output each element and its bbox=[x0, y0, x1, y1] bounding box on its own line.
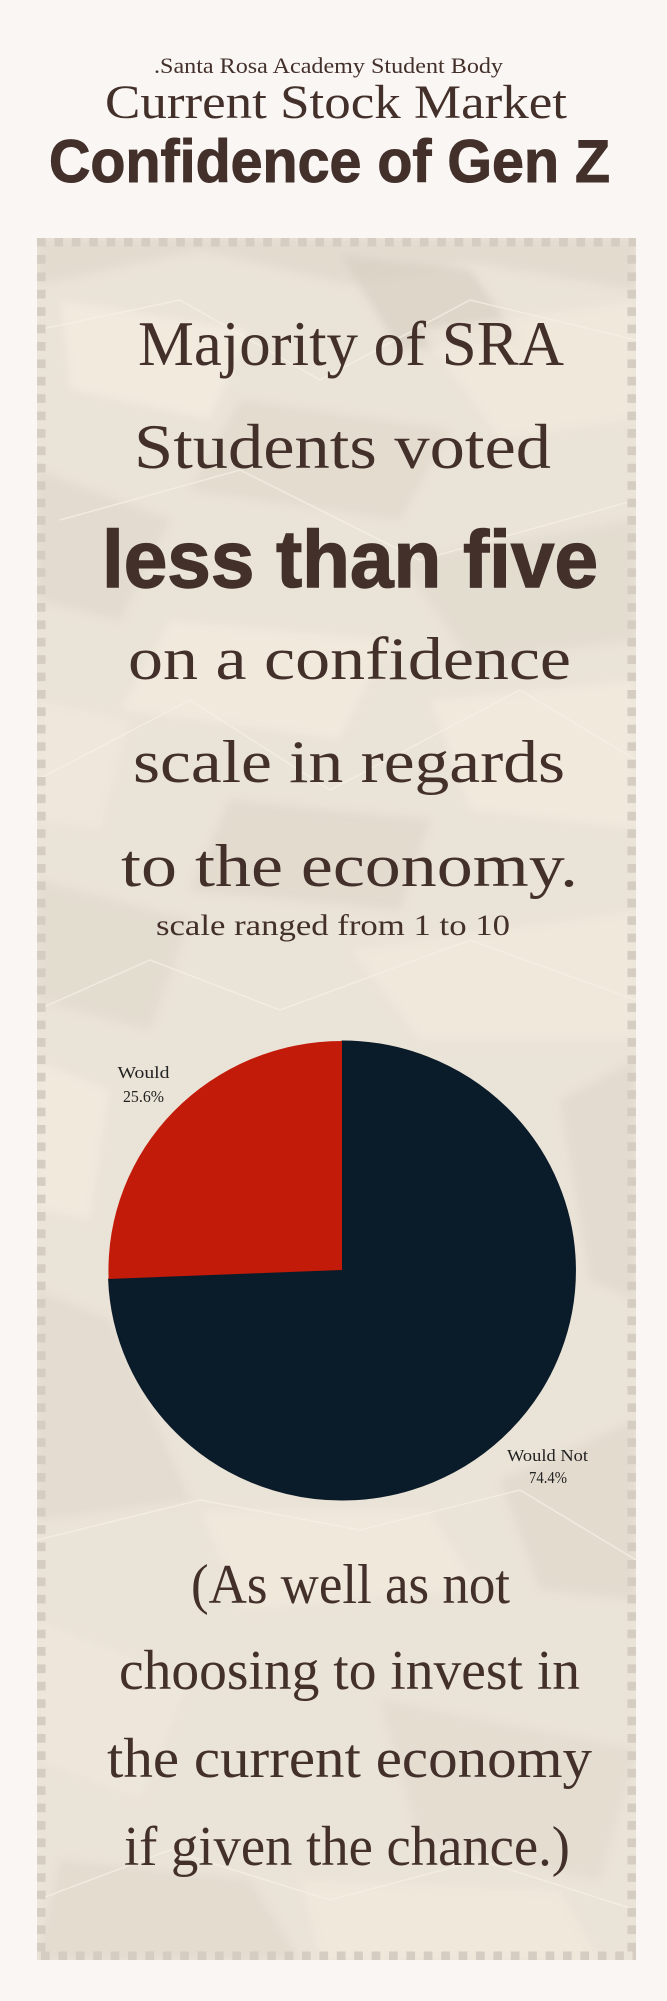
closing statement bbox=[107, 1554, 592, 1878]
header bbox=[49, 53, 610, 195]
label: would bbox=[118, 1063, 170, 1106]
title line one: Current Stock Market bbox=[105, 76, 568, 129]
main statement: Students voted bbox=[134, 411, 551, 482]
scale note: scale ranged from 1 to 10 bbox=[156, 909, 510, 942]
label: would not: 74.4% bbox=[529, 1468, 567, 1487]
dashed panel border bbox=[37, 242, 636, 1958]
emphasis text: less than five bbox=[102, 515, 598, 605]
pie chart bbox=[108, 1041, 575, 1500]
slice: would bbox=[108, 1041, 342, 1279]
panel: crumpled paper bbox=[37, 238, 636, 1960]
slice: would not bbox=[109, 1041, 575, 1500]
main statement: scale in regards bbox=[133, 729, 565, 795]
main statement bbox=[102, 308, 598, 899]
label: would: Would bbox=[118, 1063, 170, 1082]
label: would not bbox=[507, 1446, 588, 1487]
paper crease lines bbox=[37, 300, 636, 1910]
main statement: to the economy. bbox=[121, 833, 578, 899]
closing statement: the current economy bbox=[107, 1728, 592, 1790]
label: would not: Would Not bbox=[507, 1446, 588, 1465]
closing statement: (As well as not bbox=[191, 1554, 510, 1616]
label: would: 25.6% bbox=[123, 1087, 164, 1106]
main statement: Majority of SRA bbox=[138, 308, 564, 379]
closing statement: choosing to invest in bbox=[119, 1640, 580, 1702]
closing statement: if given the chance.) bbox=[124, 1816, 570, 1878]
title line two: Confidence of Gen Z bbox=[49, 128, 610, 195]
main statement: on a confidence bbox=[128, 626, 571, 692]
school subtitle: .Santa Rosa Academy Student Body bbox=[154, 53, 503, 78]
